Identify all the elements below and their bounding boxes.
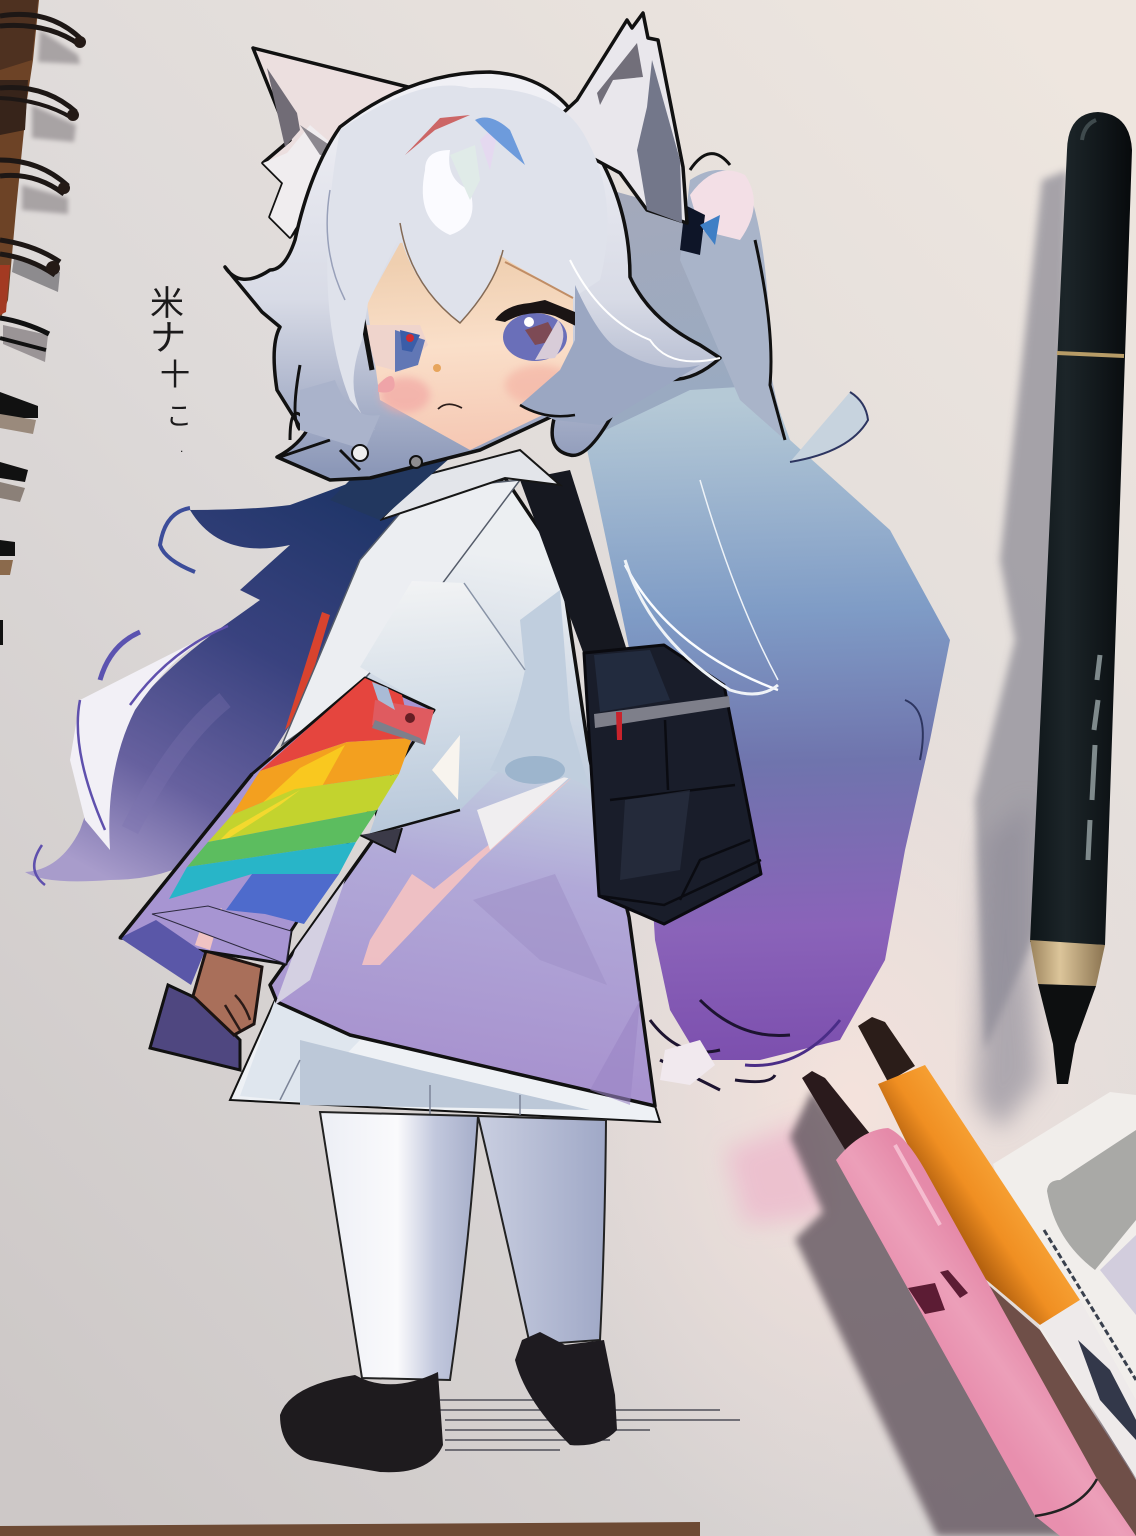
right shoe	[515, 1332, 617, 1445]
black pen shadow	[975, 170, 1068, 1050]
skirt	[230, 1000, 660, 1122]
left front strip	[282, 480, 520, 745]
secondary pen shadow	[975, 800, 1040, 1130]
long back hair right	[585, 385, 950, 1090]
face-frame locks	[280, 285, 700, 470]
red item behind jacket	[285, 612, 330, 730]
tray	[993, 1092, 1136, 1480]
hand	[193, 951, 262, 1035]
nose	[433, 364, 441, 372]
jacket body	[270, 478, 655, 1106]
right eye	[495, 300, 580, 361]
right ear	[563, 13, 687, 223]
spiral binding rings	[0, 14, 86, 645]
shadow between markers	[960, 1260, 1136, 1536]
orange marker	[858, 1017, 1136, 1478]
jacket reflection	[275, 774, 640, 1105]
left eye	[362, 315, 428, 392]
handwritten note: 米	[150, 285, 184, 323]
purple panel behind hand	[150, 985, 240, 1070]
wisps: back hair left	[25, 455, 420, 885]
marker shadow	[790, 1090, 1136, 1536]
left leg	[320, 1112, 478, 1380]
hair behind head	[590, 190, 790, 460]
pink glow on paper	[725, 1120, 830, 1225]
arm folds	[360, 583, 590, 852]
handwritten note: .	[180, 441, 183, 455]
handwritten note: 十	[160, 359, 190, 392]
handwritten note	[150, 285, 192, 455]
sleeve zipper tab	[372, 682, 434, 745]
wood table at left and bottom	[0, 0, 700, 1536]
collar	[380, 450, 560, 520]
right leg	[478, 1116, 606, 1345]
backpack strap	[520, 470, 630, 660]
silver strand over bag	[625, 560, 778, 694]
left shoe	[280, 1372, 443, 1472]
face	[367, 227, 575, 450]
pink marker	[802, 1071, 1136, 1536]
handwritten note: こ	[166, 401, 192, 431]
rainbow sleeve	[120, 678, 434, 985]
dark blue nape hair	[330, 440, 450, 520]
mouth	[438, 404, 462, 409]
main hair mass	[225, 72, 720, 480]
hatching shadow	[440, 1400, 740, 1450]
ponytail	[680, 154, 785, 440]
black pen	[1030, 112, 1132, 1084]
left ear	[253, 48, 420, 237]
center bangs	[327, 86, 720, 430]
upper arm	[360, 581, 530, 835]
bag	[584, 645, 761, 924]
handwritten note: ナ	[150, 317, 186, 358]
